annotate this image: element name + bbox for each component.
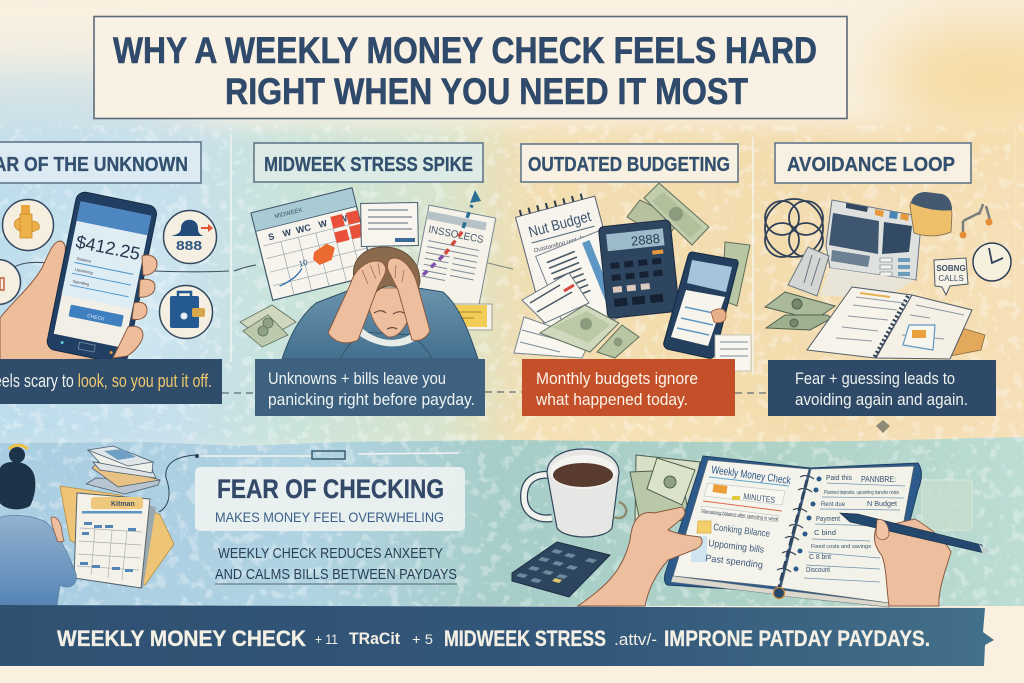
banner text: MIDWEEK STRESS	[444, 626, 606, 651]
text: weekly check reduces anxiety	[215, 545, 457, 584]
illustration: envelope receipts	[788, 247, 829, 296]
text: weekly check reduces anxiety: WEEKLY CHECK REDUCES ANXEETY	[218, 545, 443, 562]
illustration: budget phone	[664, 252, 738, 358]
illustration: yellow folder	[60, 486, 174, 585]
icon: phone	[46, 191, 158, 365]
illustration: cash	[240, 305, 296, 347]
heading: outdated budgeting	[521, 144, 738, 182]
banner text: + 5	[412, 631, 433, 647]
caption: panicking: panicking right before payday.	[268, 390, 475, 409]
illustration: small calculator	[512, 542, 610, 597]
illustration: clipboard: Kitman	[111, 501, 135, 508]
icon: circle figure	[2, 200, 54, 250]
panel dividers	[231, 130, 1015, 375]
icon: phone: Balance	[77, 256, 93, 264]
illustration: calculator	[598, 220, 680, 319]
icon: hat and bills: 888	[176, 238, 202, 253]
icon: cut-off calendar circle	[0, 260, 20, 304]
illustration: weekly money check notebook: Remaining balance after spending in week	[702, 509, 778, 523]
icon: clock	[973, 243, 1011, 281]
illustration: weekly money check notebook: Fixed costs and savings	[811, 544, 872, 550]
banner text: + 11	[315, 631, 338, 647]
text: weekly check reduces anxiety: AND CALMS BILLS BETWEEN PAYDAYS	[215, 566, 457, 583]
caption: fear + guessing: Fear + guessing leads to	[795, 369, 955, 388]
banner text: IMPRONE PATDAY PAYDAYS.	[664, 626, 930, 651]
panel: midweek stress spike	[240, 143, 496, 416]
illustration: weekly money check notebook: Conking Bilance	[713, 522, 771, 540]
illustration: calendar	[251, 188, 374, 300]
banner text: WEEKLY MONEY CHECK	[57, 626, 306, 651]
icon: hat and bills	[164, 210, 216, 264]
icon: scales	[960, 204, 992, 238]
caption: fear + guessing: avoiding again and again.	[795, 390, 968, 409]
icon: phone: Spending	[72, 278, 90, 287]
illustration: cash behind notebook	[630, 455, 700, 522]
heading: outdated budgeting: OUTDATED BUDGETING	[528, 154, 730, 176]
panel: fear of checking	[0, 445, 465, 605]
caption: fear + guessing	[768, 360, 996, 416]
caption: monthly budgets: Monthly budgets ignore	[536, 369, 698, 388]
icon: tangled loop	[765, 199, 823, 257]
illustration: weekly money check notebook: Weekly Money Check	[711, 464, 792, 487]
illustration: yellow note	[445, 304, 492, 330]
illustration: budget notebook	[514, 190, 626, 333]
icon: phone: Upcoming	[75, 267, 93, 275]
hand fingers	[113, 255, 157, 358]
illustration: weekly money check notebook: Payment	[816, 516, 840, 523]
heading: midweek stress spike: MIDWEEK STRESS SPIKE	[264, 154, 473, 176]
illustration: calendar: WC	[295, 222, 312, 235]
illustration: weekly money check notebook: MINUTES	[743, 491, 776, 505]
illustration: budget notebook: Nut Budget	[527, 208, 594, 241]
illustration: chart paper	[536, 230, 634, 338]
caption: monthly budgets: what happened today.	[535, 390, 688, 409]
title	[94, 16, 847, 118]
illustration: calendar: W	[338, 213, 349, 225]
illustration: weekly money check notebook	[664, 456, 921, 607]
panel: weekly money check notebook	[512, 449, 989, 607]
illustration: dashed trend arrow	[423, 190, 481, 275]
illustration: weekly money check notebook: Uppoming bills	[708, 538, 765, 556]
title: RIGHT WHEN YOU NEED IT MOST	[225, 71, 748, 112]
icon: lock bag	[160, 286, 212, 338]
illustration: connector curve with pin	[159, 451, 458, 512]
illustration: calendar: 10	[298, 258, 309, 269]
illustration: weekly money check notebook: Planned deposits, upcoming transfer notes	[824, 490, 899, 496]
illustration: invoice page: INSSOLECS	[427, 224, 485, 246]
banner: bottom summary strip	[0, 605, 994, 666]
illustration: weekly money check notebook: C bind	[814, 530, 836, 537]
illustration: person from behind	[0, 445, 76, 605]
callout: fear of checking	[195, 467, 465, 531]
connector lines between panels	[8, 262, 768, 393]
heading: avoidance loop: AVOIDANCE LOOP	[787, 154, 955, 176]
illustration: invoice page	[411, 205, 496, 308]
illustration: cash	[765, 292, 835, 330]
illustration: weekly money check notebook: Discount	[806, 567, 830, 574]
callout: fear of checking: FEAR OF CHECKING	[217, 474, 444, 504]
icon: speech bubble	[934, 258, 968, 295]
caption: panicking	[255, 359, 485, 416]
watercolor speckle	[0, 125, 1024, 606]
banner text	[57, 626, 930, 651]
illustration: coffee mug	[524, 449, 626, 537]
caption: scary	[0, 359, 222, 404]
illustration: back bills	[627, 183, 750, 306]
illustration: calendar: MIDWEEK	[274, 208, 303, 220]
heading: avoidance loop	[775, 143, 971, 183]
illustration: open notebook	[807, 287, 985, 359]
icon: phone: CHECK	[87, 313, 106, 323]
illustration: calendar: W	[282, 227, 293, 239]
caption: panicking: Unknowns + bills leave you	[268, 369, 446, 388]
illustration: right hand with pen	[840, 513, 989, 606]
banner text: TRaCit	[349, 629, 400, 648]
illustration: budget notebook: Outstanding rent, food	[533, 233, 592, 255]
banner text: .attv/-	[614, 630, 657, 649]
illustration: weekly money check notebook: Rent due	[821, 501, 845, 508]
illustration: stressed person	[282, 247, 478, 359]
icon: speech bubble: SOBNG	[936, 264, 966, 273]
illustration: receipts and cash stack	[514, 273, 639, 358]
icon: phone: $412.25	[74, 232, 142, 264]
heading: fear of the unknown	[0, 142, 201, 183]
illustration: weekly money check notebook: N Budget	[867, 501, 897, 508]
illustration: book stack	[86, 446, 160, 494]
illustration: weekly money check notebook: Paid this	[826, 475, 852, 482]
illustration: ghost card	[922, 480, 972, 530]
heading: midweek stress spike	[254, 143, 483, 182]
illustration: weekly money check notebook: C 8 bnt	[809, 554, 831, 561]
illustration: calendar: W	[317, 218, 329, 230]
panel: fear of the unknown	[0, 142, 222, 404]
illustration: left hand	[578, 507, 702, 606]
illustration: paper note	[361, 202, 418, 246]
hand back	[0, 241, 125, 360]
panel: avoidance loop	[765, 143, 1011, 433]
icon: speech bubble: CALLS	[938, 274, 964, 283]
icon: jar	[910, 192, 952, 236]
title: WHY A WEEKLY MONEY CHECK FEELS HARD	[113, 30, 817, 71]
illustration: calculator: 2888	[630, 231, 661, 249]
illustration: weekly money check notebook: PANNBRE:	[861, 475, 896, 484]
illustration: calendar: S	[267, 231, 275, 242]
icon: small diamond	[876, 420, 890, 433]
illustration: kiosk device	[820, 200, 921, 300]
illustration: clipboard	[74, 492, 156, 588]
panel: outdated budgeting	[514, 144, 751, 416]
illustration: weekly money check notebook: Past spending	[705, 553, 764, 571]
illustration: lower right receipt	[715, 335, 751, 371]
caption: monthly budgets	[522, 359, 735, 416]
callout: fear of checking: MAKES MONEY FEEL OVERWHELING	[215, 509, 444, 525]
bottom watercolor band	[0, 437, 1024, 606]
